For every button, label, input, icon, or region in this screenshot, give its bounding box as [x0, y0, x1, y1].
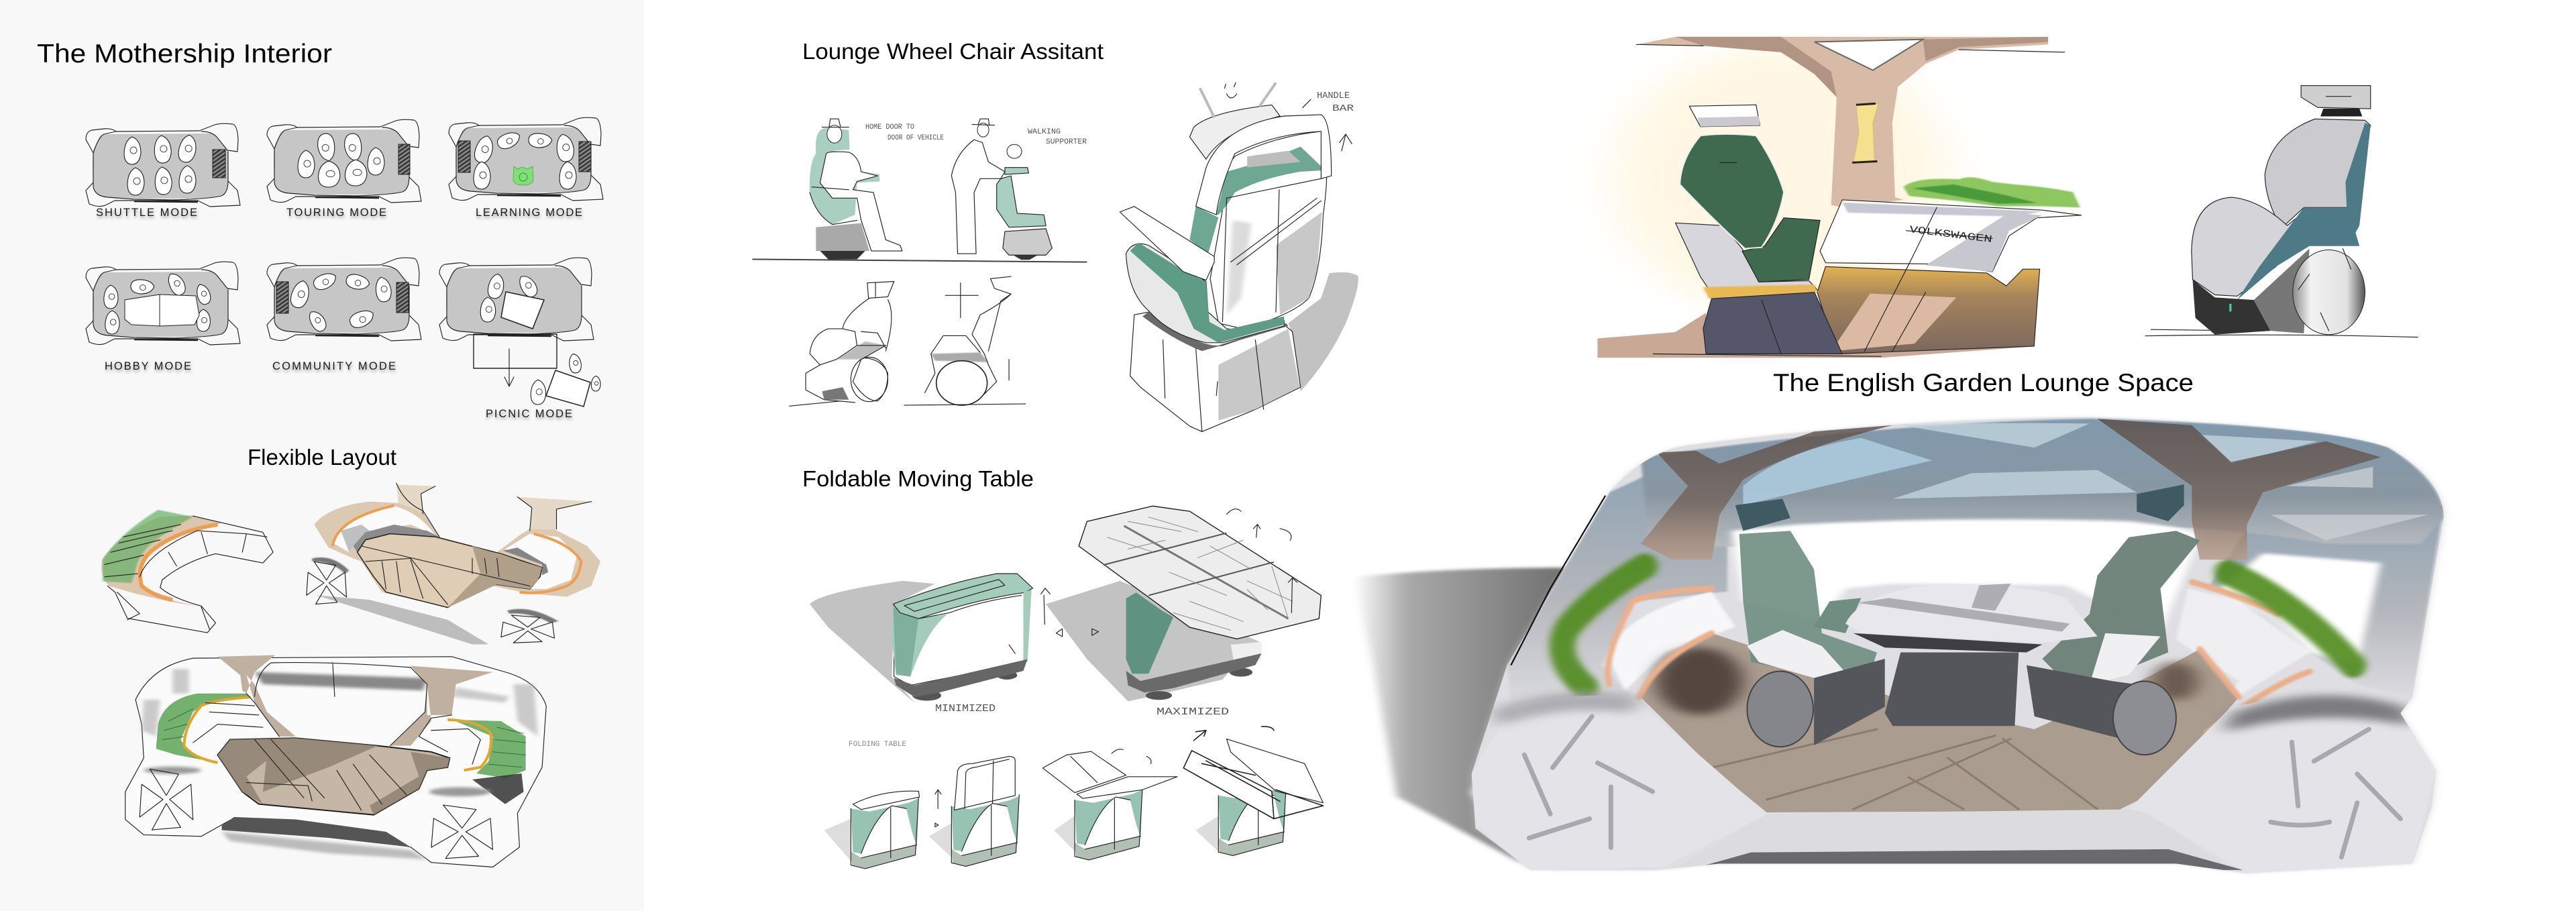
vehicle body soft glow — [1472, 417, 2444, 873]
sketch: maximized table — [1046, 506, 1321, 701]
panel: background of The Mothership Interior — [0, 0, 644, 911]
sketch: flexible layout drawings — [101, 483, 600, 867]
interior floor — [1608, 582, 2310, 812]
windshield edge stroke — [1511, 496, 1605, 665]
central window — [1731, 519, 2200, 633]
heading: Foldable Moving Table: Foldable Moving Table — [802, 466, 1034, 491]
plan: learning mode — [449, 117, 603, 219]
pillars — [1641, 419, 2381, 559]
render: large vehicle interior — [1354, 416, 2452, 876]
vehicle body and shading, clipped to the vehicle outline — [1460, 416, 2452, 876]
icon: highlighted green seat — [513, 166, 533, 185]
handwritten note: home door to door of vehicle — [865, 123, 944, 142]
plan: shuttle mode: SHUTTLE MODE — [96, 207, 197, 219]
plan: touring mode: TOURING MODE — [286, 207, 386, 219]
plan: shuttle mode — [86, 123, 240, 219]
handwritten note: home door to door of vehicle: HOME DOOR TO — [865, 123, 914, 131]
handwritten label: maximized: MAXIMIZED — [1157, 706, 1229, 718]
plan: picnic mode: PICNIC MODE — [486, 408, 572, 420]
handwritten note: home door to door of vehicle: DOOR OF VEHICLE — [888, 134, 944, 142]
handwritten brand on lounge: VOLKSWAGEN: VOLKSWAGEN — [1909, 224, 1993, 246]
handwritten note: handle bar: HANDLE — [1317, 91, 1350, 101]
handwritten label: folding table: FOLDING TABLE — [849, 741, 906, 749]
sketch: seated figure in chair — [810, 119, 902, 259]
handwritten note: handle bar: BAR — [1332, 103, 1354, 114]
handwritten label: minimized: MINIMIZED — [935, 703, 996, 714]
plan: community mode — [267, 258, 421, 372]
plan: hobby mode — [86, 262, 240, 372]
heading: Flexible Layout: Flexible Layout — [248, 445, 396, 470]
sketch: garden module C-shape — [101, 510, 273, 633]
sketch: minimized table — [810, 574, 1033, 703]
plan: touring mode — [267, 119, 421, 219]
heading: Lounge Wheel Chair Assitant: Lounge Wheel Chair Assitant — [802, 39, 1104, 64]
front fenders and bumper — [1472, 692, 2436, 873]
handwritten note: walking supporter: SUPPORTER — [1046, 138, 1087, 146]
render: wheel chair side view — [2145, 86, 2418, 337]
lounge chair left — [1735, 499, 1885, 747]
right side glass — [2208, 505, 2444, 697]
handwritten note: walking supporter — [1028, 128, 1087, 146]
render: garden lounge and chair — [1597, 37, 2418, 358]
moss planter right — [2227, 572, 2353, 665]
side windows — [1609, 592, 1735, 691]
lounge chair right — [2027, 484, 2200, 755]
sketch: foldable table drawings — [810, 506, 1323, 869]
plan: picnic mode — [439, 258, 600, 420]
arrows between table states — [1041, 588, 1099, 637]
sketch: wheel chair assistant drawings — [752, 83, 1358, 431]
heading: The English Garden Lounge Space: The English Garden Lounge Space — [1773, 369, 2194, 396]
handwritten note: handle bar — [1317, 91, 1354, 114]
sketch: standing figure with chair — [951, 119, 1052, 260]
moss planter left — [1562, 566, 1645, 688]
sketch: lounge floor top view — [307, 483, 600, 645]
render: garden lounge module — [1597, 37, 2082, 358]
ground shadow — [1354, 568, 1570, 863]
sketch: folding sequence step 4 — [1183, 727, 1323, 855]
sketch: full vehicle interior — [125, 655, 546, 867]
wheel arch spokes — [1524, 716, 2400, 857]
plan: community mode: COMMUNITY MODE — [272, 360, 396, 372]
plan: learning mode: LEARNING MODE — [476, 207, 582, 219]
plan: hobby mode: HOBBY MODE — [105, 360, 191, 372]
ground line — [752, 259, 1087, 262]
roof glass — [1641, 419, 2444, 547]
sketch: large lounge chair rear view — [1120, 83, 1358, 431]
left side glass — [1507, 476, 1729, 692]
title: The Mothership Interior: The Mothership Interior — [37, 40, 332, 68]
handwritten note: walking supporter: WALKING — [1028, 128, 1061, 136]
sketch: chair three quarter view — [790, 282, 894, 406]
table — [1845, 584, 2098, 726]
sketch: folding sequence step 1 — [824, 791, 920, 869]
sketch: folding sequence step 3 — [1042, 749, 1177, 860]
sketch: chair side view — [904, 276, 1026, 405]
sketch: folding sequence step 2 — [929, 757, 1019, 866]
